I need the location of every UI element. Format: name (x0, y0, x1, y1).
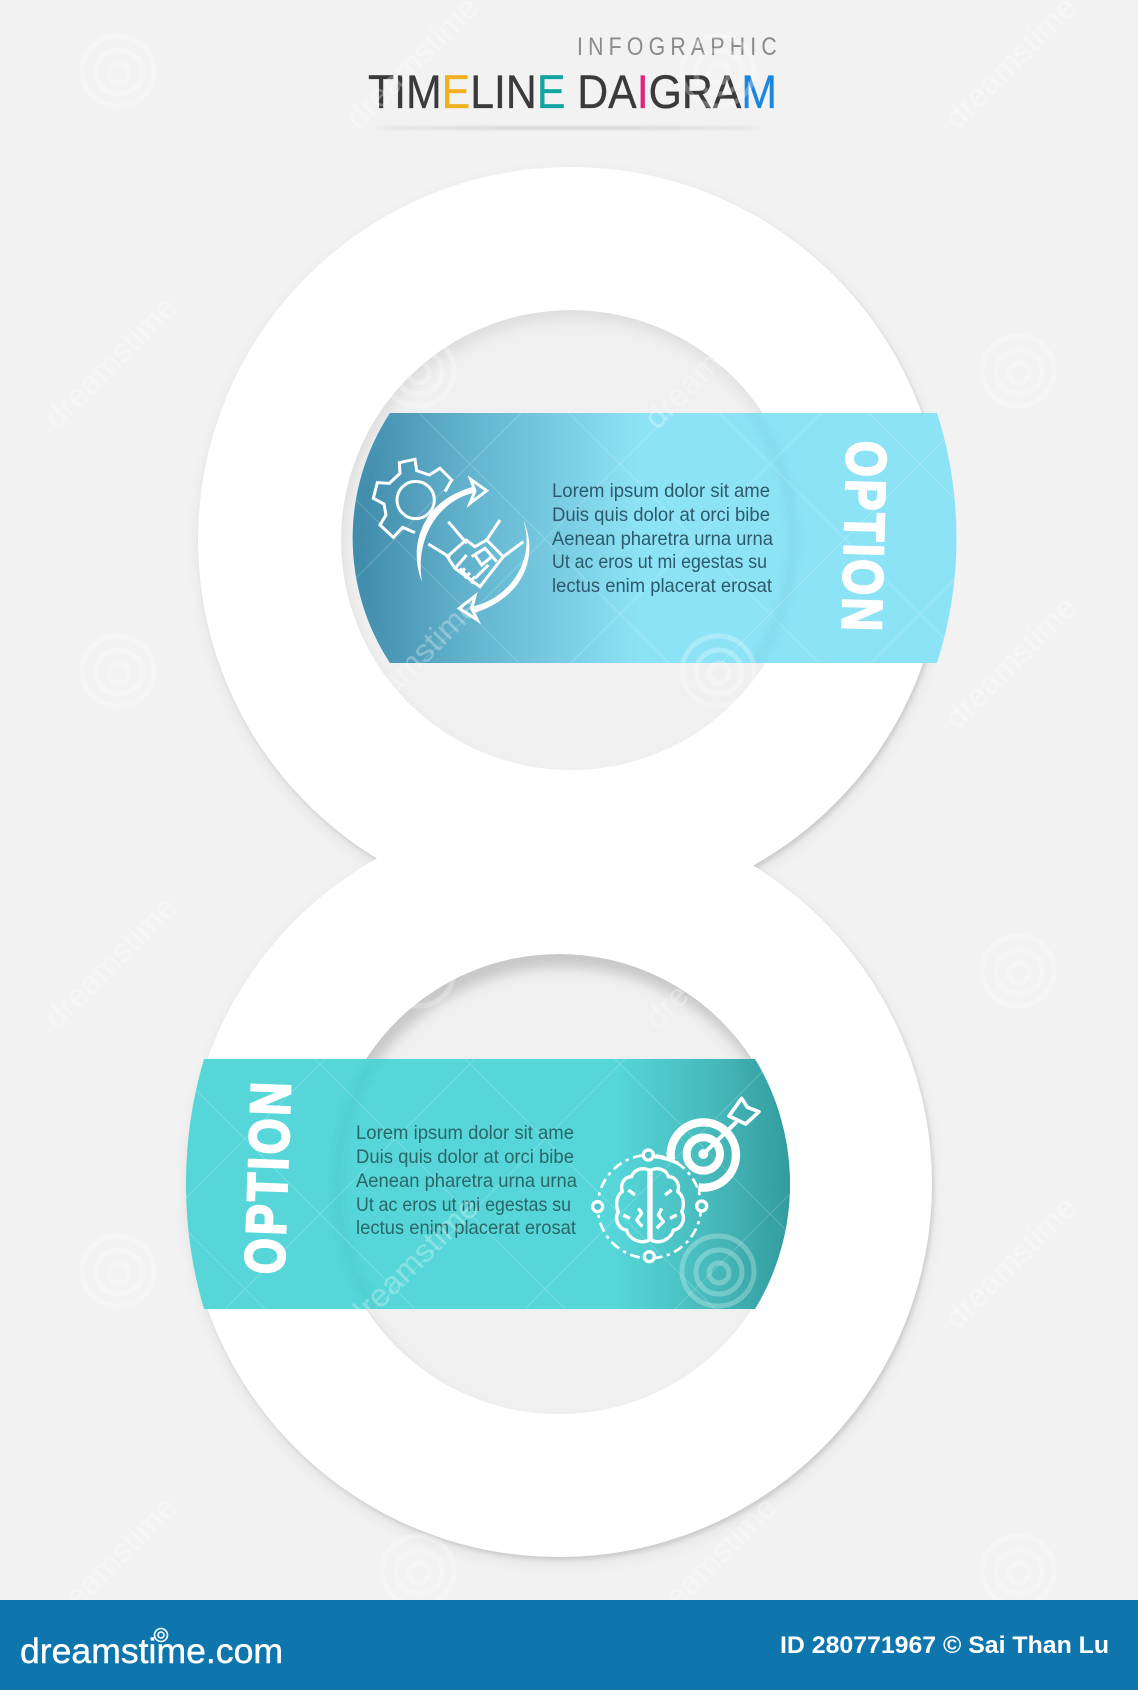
watermark text: dreamstime (637, 1489, 784, 1636)
watermark text: dreamstime (37, 889, 184, 1036)
watermark text: dreamstime (637, 889, 784, 1036)
footer bar (0, 1600, 1138, 1690)
main title: TIMELINE DAIGRAM (368, 65, 777, 118)
body text: Lorem ipsum dolor sit ame (356, 1122, 574, 1144)
figure eight white rings (186, 167, 944, 1557)
body text: lectus enim placerat erosat (356, 1217, 577, 1239)
upper ring hole (341, 310, 765, 770)
body text: Lorem ipsum dolor sit ame (552, 480, 770, 502)
footer logo: dreamstime.com (20, 1632, 283, 1671)
panel: lower option band (186, 1059, 790, 1309)
image id and credit: ID 280771967 © Sai Than Lu (780, 1632, 1109, 1659)
body text: Duis quis dolor at orci bibe (356, 1146, 574, 1168)
icon: logo spiral (154, 1628, 168, 1642)
icon: brain and target (593, 1098, 759, 1262)
title underline shadow (373, 127, 763, 129)
watermark text: dreamstime (339, 589, 486, 736)
option label: OPTION (233, 1081, 302, 1275)
watermark text: dreamstime (637, 289, 784, 436)
watermark text: dreamstime (37, 289, 184, 436)
lower ring hole (366, 954, 752, 1414)
option label: OPTION (830, 440, 898, 632)
watermark text: dreamstime (339, 1189, 486, 1336)
body text: Aenean pharetra urna urna (552, 528, 773, 550)
body text (356, 1122, 577, 1239)
body text: Ut ac eros ut mi egestas su (356, 1194, 571, 1216)
panel: upper option band (352, 413, 956, 663)
band fill (352, 413, 956, 663)
body text: Ut ac eros ut mi egestas su (552, 551, 767, 573)
body text: lectus enim placerat erosat (552, 575, 773, 597)
icon: gear handshake cycle (373, 459, 529, 620)
watermark text: dreamstime (37, 1489, 184, 1636)
title block (368, 32, 777, 129)
subtitle: INFOGRAPHIC (577, 32, 777, 60)
watermark text: dreamstime (937, 589, 1084, 736)
body text: Aenean pharetra urna urna (356, 1170, 577, 1192)
band fill (186, 1059, 790, 1309)
watermark spirals (82, 36, 1054, 1606)
watermark text: dreamstime (937, 1189, 1084, 1336)
body text: Duis quis dolor at orci bibe (552, 504, 770, 526)
body text (552, 480, 773, 597)
